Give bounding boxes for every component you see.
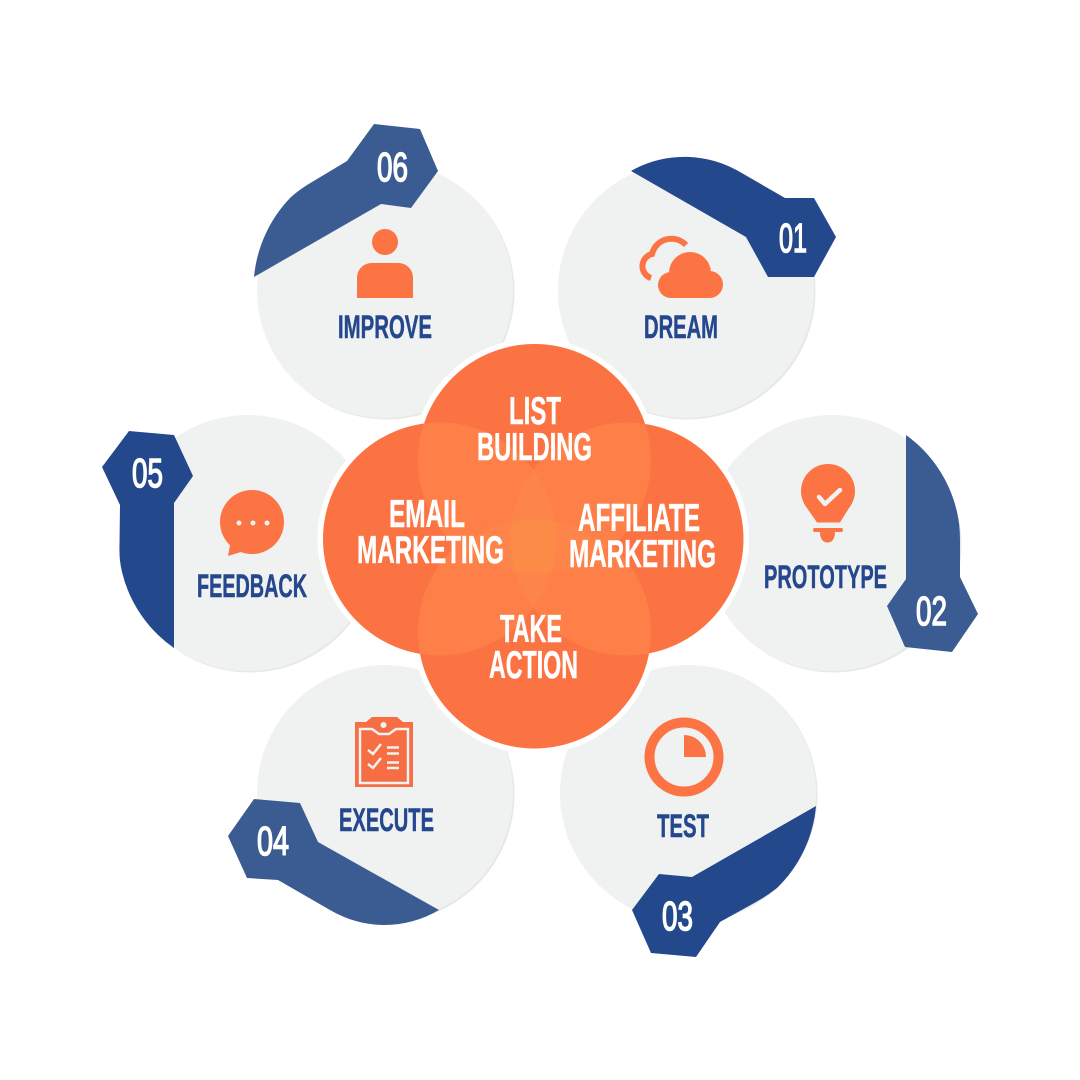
venn white halo xyxy=(318,338,749,754)
venn adjacent overlaps xyxy=(418,422,651,656)
banner 01 xyxy=(631,157,836,277)
label improve: IMPROVE xyxy=(338,309,432,345)
label test: TEST xyxy=(657,808,709,844)
banner 05 xyxy=(102,431,193,648)
heading email marketing: MARKETING xyxy=(357,529,504,572)
icon: clipboard xyxy=(355,717,413,787)
heading list building xyxy=(477,390,592,469)
panel: step 02 prototype xyxy=(704,415,978,672)
heading take action xyxy=(489,608,578,687)
icon: person xyxy=(357,229,413,298)
panel: step 04 execute xyxy=(228,665,514,925)
icon: speech bubble xyxy=(220,490,284,556)
icon: timer xyxy=(650,722,718,792)
panel: step 05 feedback xyxy=(102,415,378,672)
number 04: 04 xyxy=(257,818,289,864)
heading take action: ACTION xyxy=(489,644,578,687)
heading email marketing xyxy=(357,493,504,572)
banner 04 xyxy=(228,799,439,925)
number 01: 01 xyxy=(779,215,807,261)
venn base circles xyxy=(323,344,744,748)
label feedback: FEEDBACK xyxy=(197,568,307,604)
icon: clouds xyxy=(642,239,723,298)
number 02: 02 xyxy=(916,588,947,634)
panel: step 03 test xyxy=(560,665,818,957)
infographic diagram xyxy=(102,124,978,957)
number 03: 03 xyxy=(662,893,693,939)
heading email marketing: EMAIL xyxy=(389,493,465,536)
venn centre overlap xyxy=(418,520,651,753)
banner 02 xyxy=(887,435,978,652)
number 06: 06 xyxy=(377,144,408,190)
number 05: 05 xyxy=(132,450,163,496)
venn opposite overlaps xyxy=(323,422,651,753)
panel: step 01 dream xyxy=(558,157,836,420)
heading list building: BUILDING xyxy=(477,426,592,469)
banner 06 xyxy=(254,124,438,277)
banner 03 xyxy=(632,806,816,957)
label prototype: PROTOTYPE xyxy=(764,559,887,595)
heading list building: LIST xyxy=(509,390,561,433)
heading affiliate marketing: MARKETING xyxy=(569,533,716,576)
icon: light bulb xyxy=(801,464,855,542)
heading affiliate marketing: AFFILIATE xyxy=(578,497,700,540)
panel: step 06 improve xyxy=(254,124,514,420)
heading take action: TAKE xyxy=(500,608,562,651)
panel: central venn diagram xyxy=(318,338,749,754)
label execute: EXECUTE xyxy=(339,802,434,838)
heading affiliate marketing xyxy=(569,497,716,576)
label dream: DREAM xyxy=(644,309,718,345)
